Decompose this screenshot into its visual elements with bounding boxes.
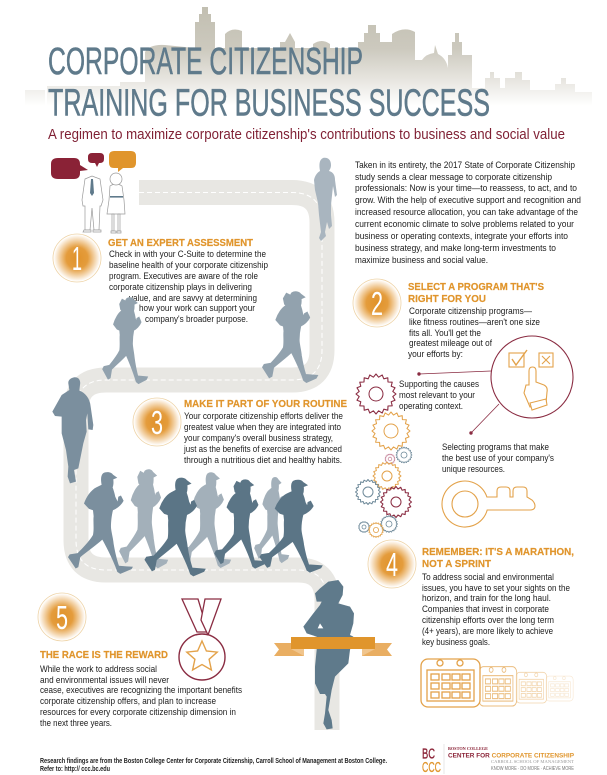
logo: CENTER FOR CORPORATE CITIZENSHIP <box>448 752 575 760</box>
text: step 2: Corporate citizenship programs— <box>409 306 532 317</box>
callout line: causes <box>417 371 491 376</box>
icon: medal <box>179 599 225 680</box>
text: step 1: value, and are savvy at determining <box>129 293 257 304</box>
text: step 5: cease, executives are recognizing the important benefits <box>40 685 242 696</box>
text: step 1: corporate citizenship plays in delivering <box>109 282 252 293</box>
heading: step 2: RIGHT FOR YOU <box>408 293 486 305</box>
text: step 3: through a nutritious diet and healthy habits. <box>184 455 342 466</box>
text: step 5: resources for every corporate citizenship dimension in <box>40 707 236 718</box>
heading: step 4: REMEMBER: IT'S A MARATHON, <box>422 546 574 558</box>
intro text: grow. With the help of executive support and recognition and <box>355 195 581 206</box>
logo: KNOW MORE · DO MORE · ACHIEVE MORE <box>491 766 574 772</box>
group of runners <box>68 470 322 576</box>
heading: step 1: GET AN EXPERT ASSESSMENT <box>108 237 254 249</box>
text: step 2: fits all. You'll get the <box>409 328 481 339</box>
text: step 3: Your corporate citizenship efforts deliver the <box>184 411 343 422</box>
text: supporting causes: operating context. <box>399 401 463 412</box>
text: step 4: citizenship efforts over the long term <box>422 615 554 626</box>
icon: key <box>442 481 535 527</box>
badge: step 3: 3 <box>151 404 163 441</box>
heading: step 4: NOT A SPRINT <box>422 558 492 570</box>
text: step 5: While the work to address social <box>40 664 157 675</box>
intro text: current economic climate to solve problems related to your <box>355 219 575 230</box>
badge: step 3 <box>133 398 181 446</box>
icon: calendars <box>421 659 573 707</box>
text: step 4 <box>422 572 570 648</box>
heading: step 2: SELECT A PROGRAM THAT'S <box>408 281 544 293</box>
text: step 4: To address social and environmental <box>422 572 554 583</box>
intro text: professionals: Now is your time—to reassess, to act, and to <box>355 183 577 194</box>
runner: top right <box>314 158 337 241</box>
text: step 5 <box>40 664 242 729</box>
logo: BOSTON COLLEGE <box>448 746 488 751</box>
text: step 3: greatest value when they are integrated into <box>184 422 341 433</box>
badge: step 2 <box>353 279 401 327</box>
text: selecting programs: unique resources. <box>442 464 505 475</box>
skyline background <box>25 7 592 112</box>
finish ribbon <box>274 637 392 656</box>
badge: step 4 <box>368 540 416 588</box>
text: step 1: program. Executives are aware of the role <box>109 271 258 282</box>
subtitle: A regimen to maximize corporate citizenship's contributions to business and social value <box>48 127 565 143</box>
intro text: business strategy, and make long-term investments to <box>355 243 556 254</box>
runner: big front-facing <box>52 377 93 483</box>
running road path <box>76 192 327 730</box>
text: selecting programs <box>442 442 554 475</box>
badge: step 5: 5 <box>56 599 68 636</box>
logo <box>422 744 575 775</box>
text: step 4: key business goals. <box>422 637 490 648</box>
runner: right on road <box>263 292 317 382</box>
text: step 2: greatest mileage out of <box>409 338 492 349</box>
heading: step 5: THE RACE IS THE REWARD <box>40 649 168 661</box>
text: supporting causes: most relevant to your <box>399 390 476 401</box>
text: step 5: the next three years. <box>40 718 112 729</box>
intro text: increased resource allocation, you can take advantage of the <box>355 207 578 218</box>
footer note: Refer to: http:// ccc.bc.edu <box>40 766 110 773</box>
text: step 2: your efforts by: <box>408 349 463 360</box>
intro text <box>355 160 581 266</box>
callout line: programs <box>469 404 499 435</box>
text: step 1 <box>109 249 268 325</box>
title <box>48 41 490 124</box>
text: supporting causes <box>399 379 479 412</box>
text: step 3: just as the benefits of exercise are advanced <box>183 444 342 455</box>
badge: step 5 <box>38 593 86 641</box>
text: step 4: (4+ years), are more likely to achieve <box>422 626 553 637</box>
text: step 4: horizon, and train for the long haul. <box>422 593 551 604</box>
heading: step 3: MAKE IT PART OF YOUR ROUTINE <box>184 398 347 410</box>
badge: step 1: 1 <box>72 240 82 277</box>
text: step 5: and environmental issues will never <box>40 675 170 686</box>
heading: step 2 <box>408 281 544 305</box>
text: step 2 <box>408 306 540 360</box>
footer note: Research findings are from the Boston College Center for Corporate Citizenship, Carroll School of Management at Boston College. <box>40 758 387 765</box>
runner: left on road <box>103 298 147 383</box>
intro text: business or operating contexts, integrate your efforts into <box>355 231 568 242</box>
badge: step 2: 2 <box>371 285 383 322</box>
icon: speech bubbles and executives <box>51 151 136 233</box>
logo: BC <box>422 746 435 762</box>
text: step 1: company's broader purpose. <box>145 314 248 325</box>
main runner at finish <box>303 580 354 729</box>
text: step 4: Companies that invest in corporate <box>422 604 549 615</box>
gears illustration <box>356 374 412 538</box>
intro text: study sends a clear message to corporate citizenship <box>355 172 552 183</box>
text: selecting programs: the best use of your company's <box>442 453 554 464</box>
text: selecting programs: Selecting programs that make <box>442 442 549 453</box>
text: step 4: issues, you have to set your sights on the <box>422 583 570 594</box>
intro text: maximize business and social value. <box>355 255 488 266</box>
badge: step 4: 4 <box>386 546 398 583</box>
text: step 5: corporate citizenship offers, and plan to increase <box>40 696 216 707</box>
heading: step 4 <box>422 546 574 570</box>
intro text: Taken in its entirety, the 2017 State of Corporate Citizenship <box>355 160 575 171</box>
text: step 1: how your work can support your <box>139 303 256 314</box>
text: step 3 <box>183 411 343 466</box>
icon: hand selecting checkbox <box>491 336 573 418</box>
text: supporting causes: Supporting the causes <box>399 379 479 390</box>
footer note <box>40 758 387 773</box>
text: step 2: like fitness routines—aren't one size <box>409 317 540 328</box>
logo: CARROLL SCHOOL OF MANAGEMENT <box>491 759 575 764</box>
text: step 1: Check in with your C-Suite to determine the <box>109 249 266 260</box>
title: CORPORATE CITIZENSHIP <box>48 41 363 83</box>
text: step 1: baseline health of your corporate citizenship <box>109 260 268 271</box>
badge: step 1 <box>53 234 101 282</box>
text: step 3: your company's overall business strategy, <box>184 433 333 444</box>
